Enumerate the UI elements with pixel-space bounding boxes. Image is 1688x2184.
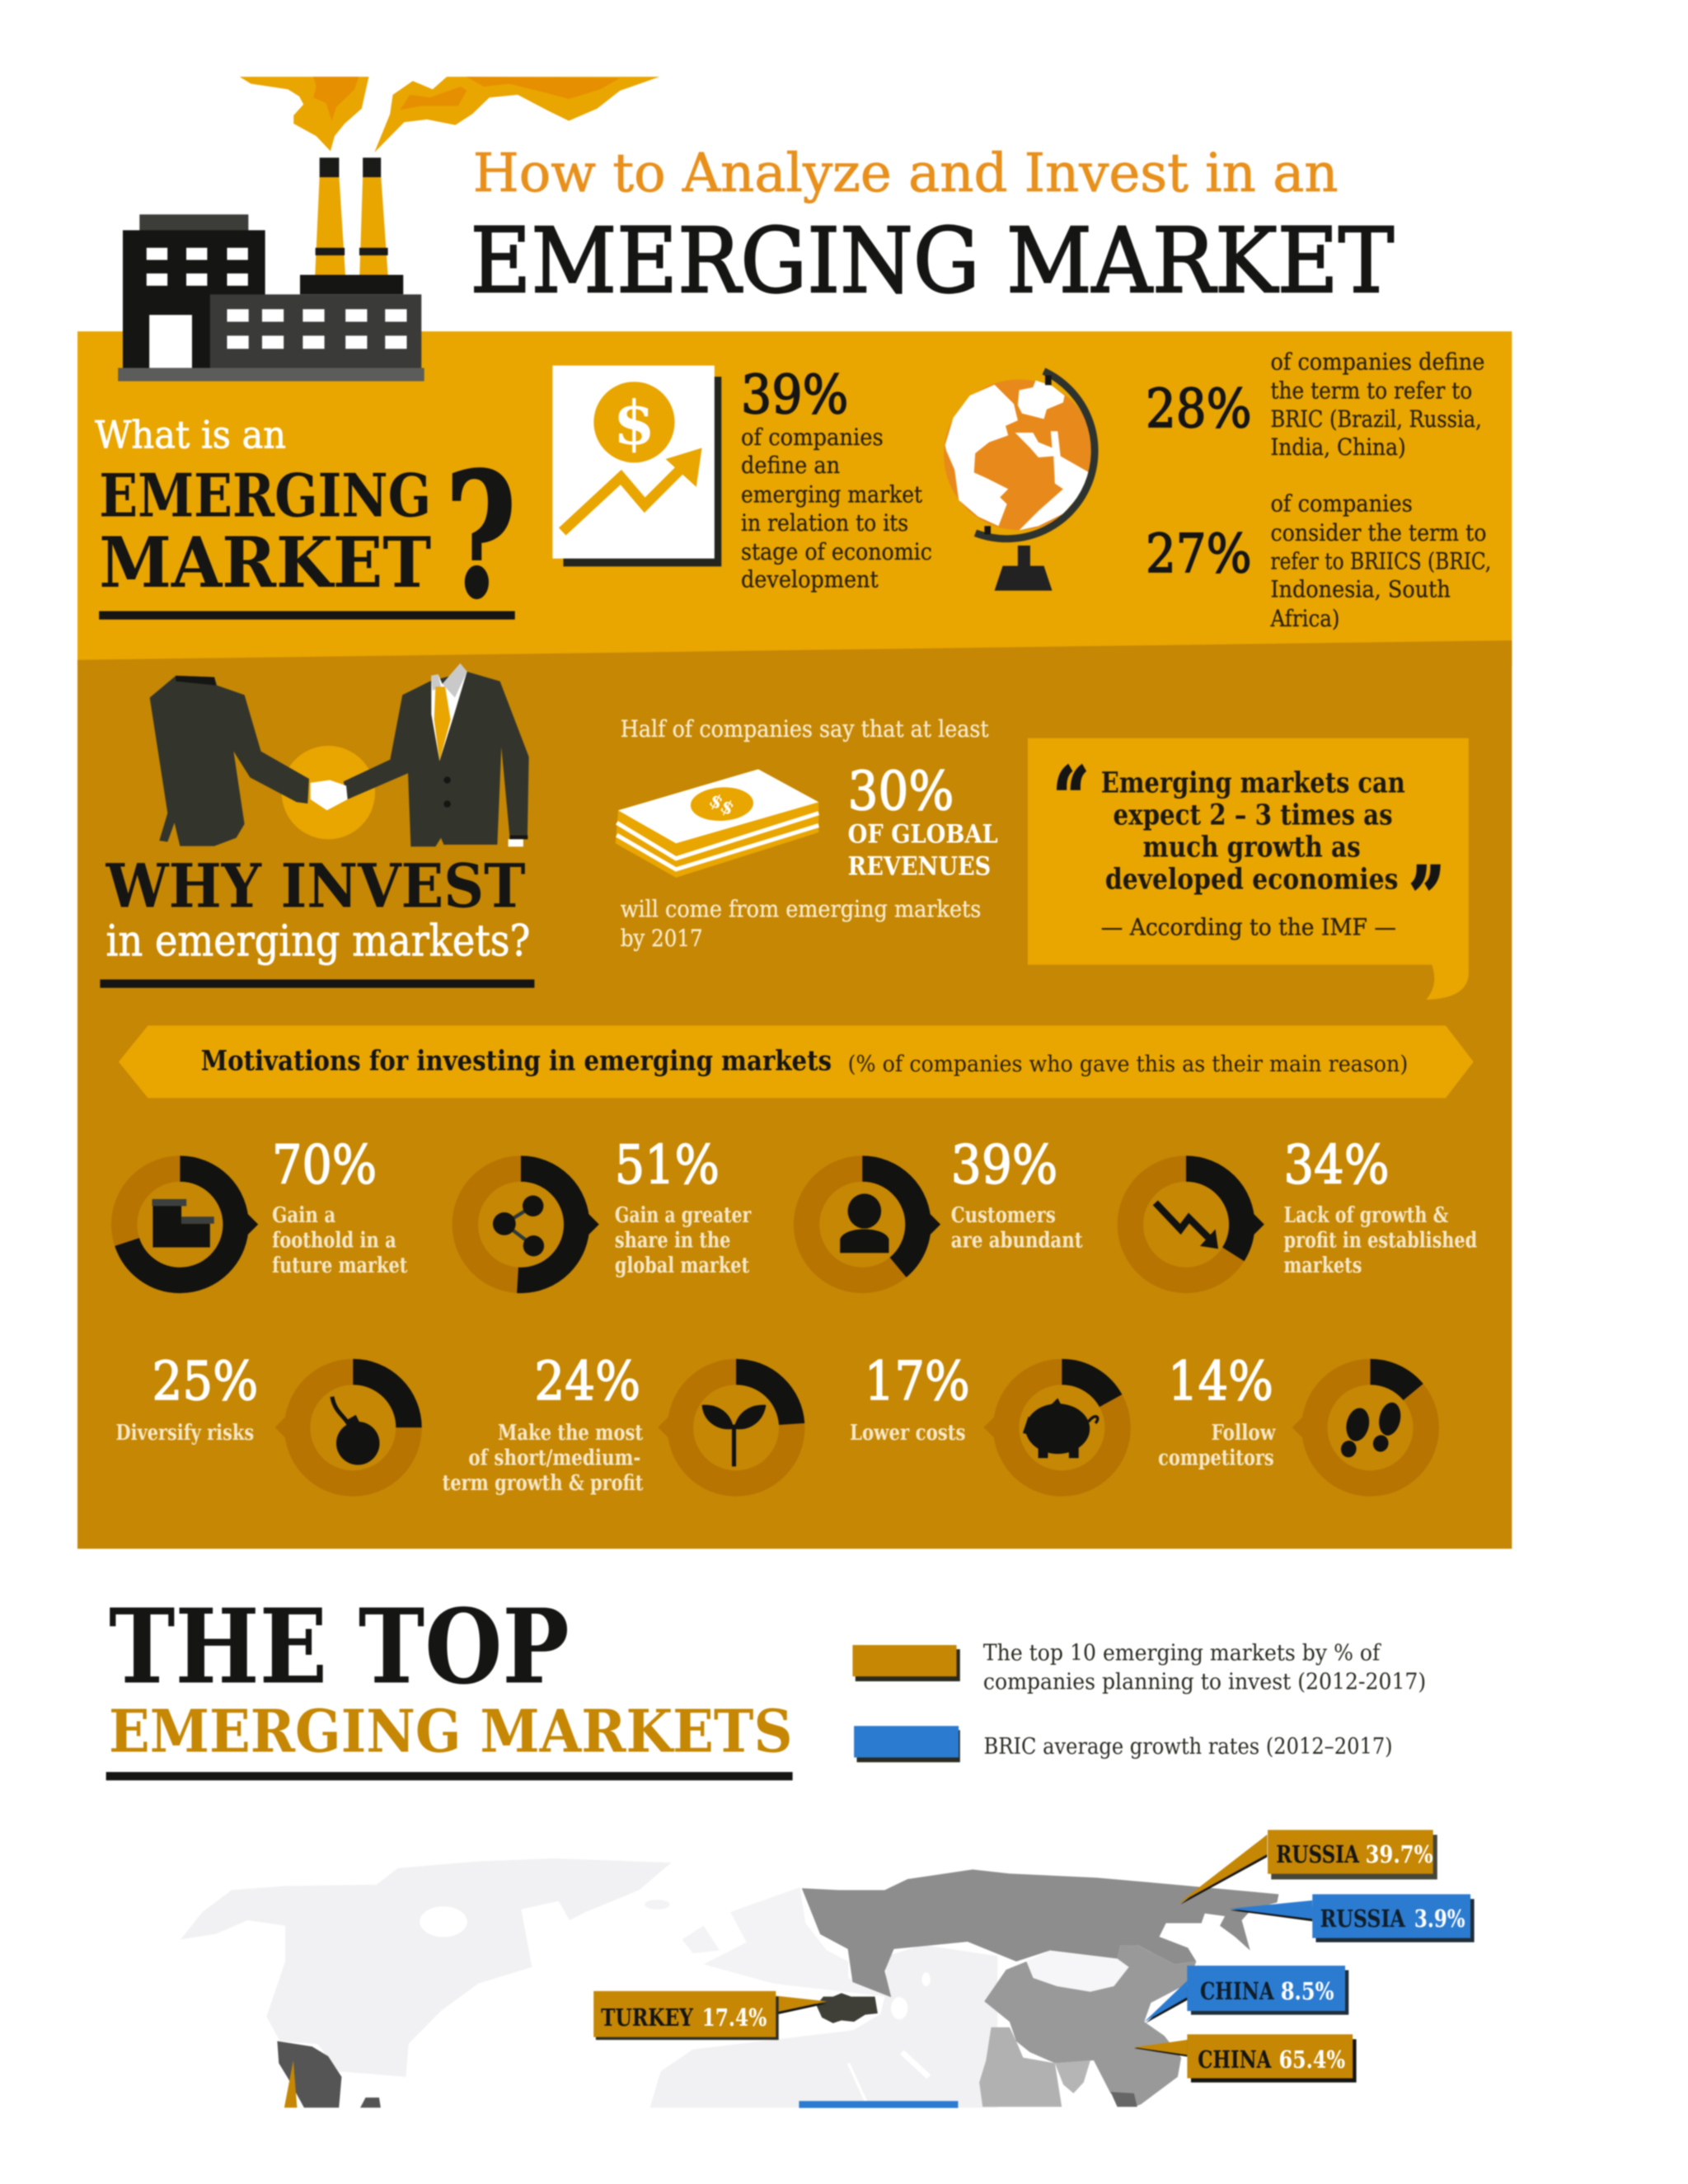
map label: Russia 39.7 percent bbox=[1178, 1830, 1437, 1905]
stat: 28 percent: BRIC (Brazil, Russia, bbox=[1270, 405, 1482, 433]
map label: Turkey 17.4 percent: 17.4% bbox=[702, 2004, 767, 2032]
map label: China 8.5 percent: 8.5% bbox=[1281, 1977, 1334, 2005]
map label: China 65.4 percent: 65.4% bbox=[1279, 2046, 1345, 2074]
callout: IMF quote: ” bbox=[1409, 850, 1444, 944]
title bbox=[471, 143, 1394, 313]
heading: what is an emerging market bbox=[95, 413, 516, 637]
donut: 14 percent follow competitors bbox=[1158, 1351, 1426, 1483]
donut: 70 percent gain a foothold: foothold in a bbox=[272, 1228, 396, 1254]
stat: 28 percent: of companies define bbox=[1270, 349, 1484, 376]
stat: 27 percent: refer to BRIICS (BRIC, bbox=[1270, 548, 1491, 575]
callout: IMF quote: “ bbox=[1053, 751, 1089, 846]
donut: 14 percent follow competitors: competitors bbox=[1158, 1446, 1274, 1471]
legend: The top 10 emerging markets by % of bbox=[983, 1641, 1381, 1666]
panel: what is an emerging market background bbox=[77, 331, 1512, 666]
stat: 39 percent: 39% bbox=[741, 364, 848, 426]
icon: stack of money bbox=[616, 769, 818, 878]
stat: 28 percent: the term to refer to bbox=[1270, 377, 1472, 404]
callout: IMF quote: developed economies bbox=[1105, 862, 1398, 896]
stat: 30 percent of global revenues: 30% bbox=[848, 761, 954, 823]
panel: why invest background bbox=[77, 640, 1512, 1549]
stat: 27 percent: Africa) bbox=[1270, 605, 1339, 632]
stat: 28 percent bbox=[1146, 349, 1484, 461]
donut: 34 percent lack of growth bbox=[1130, 1135, 1477, 1280]
donut: 24 percent short and medium term: Make the most bbox=[498, 1420, 643, 1446]
donut: 51 percent global share: Gain a greater bbox=[615, 1202, 752, 1228]
donut: 24 percent short and medium term: of short/medium- bbox=[468, 1446, 640, 1471]
heading: what is an emerging market: What is an bbox=[95, 413, 286, 457]
map label: clipped blue box bbox=[799, 2101, 958, 2108]
donut: 17 percent lower costs: 17% bbox=[865, 1351, 970, 1413]
donut: 34 percent lack of growth: profit in established bbox=[1284, 1228, 1477, 1254]
stat: 27 percent: of companies bbox=[1270, 490, 1413, 517]
title: How to Analyze and Invest in an bbox=[473, 143, 1339, 204]
icon: stack of money: $$ bbox=[706, 790, 738, 820]
heading: why invest: in emerging markets? bbox=[106, 916, 530, 967]
donut: 70 percent gain a foothold: Gain a bbox=[272, 1202, 335, 1228]
heading: why invest bbox=[100, 851, 534, 988]
stat: 27 percent: 27% bbox=[1146, 523, 1252, 585]
stat: 39 percent: in relation to its bbox=[741, 509, 908, 537]
donut: 24 percent short and medium term bbox=[443, 1351, 792, 1496]
donut: 34 percent lack of growth: Lack of growth & bbox=[1284, 1202, 1449, 1228]
donut: 14 percent follow competitors: 14% bbox=[1168, 1351, 1273, 1413]
heading: what is an emerging market: ? bbox=[445, 435, 516, 637]
donut: 17 percent lower costs bbox=[850, 1351, 1118, 1483]
donut: 39 percent customers: are abundant bbox=[951, 1228, 1083, 1254]
heading: the top emerging markets: THE TOP bbox=[109, 1587, 570, 1708]
stat: 39 percent: stage of economic bbox=[741, 538, 932, 565]
text: will come from emerging markets: will come from emerging markets bbox=[621, 895, 981, 922]
stat: 39 percent: of companies bbox=[741, 424, 884, 451]
stat: 27 percent bbox=[1146, 490, 1491, 632]
stat: 39 percent: define an bbox=[741, 452, 840, 479]
donut: 24 percent short and medium term: 24% bbox=[534, 1351, 640, 1413]
donut: 39 percent customers: 39% bbox=[951, 1135, 1057, 1197]
icon: factory smoke bbox=[240, 77, 659, 152]
stat: 27 percent: Indonesia, South bbox=[1270, 576, 1451, 603]
banner: motivations bbox=[119, 1025, 1474, 1098]
map label: Russia 39.7 percent: 39.7% bbox=[1366, 1840, 1433, 1868]
callout: IMF quote: expect 2 – 3 times as bbox=[1114, 799, 1393, 832]
heading: what is an emerging market: EMERGING bbox=[99, 460, 431, 530]
callout: IMF quote: much growth as bbox=[1143, 830, 1361, 864]
map label: China 8.5 percent: CHINA bbox=[1200, 1977, 1274, 2005]
icon: document with rising chart bbox=[552, 366, 721, 566]
stat: 39 percent: emerging market bbox=[741, 480, 922, 508]
map label: China 65.4 percent bbox=[1134, 2034, 1357, 2083]
donut: 51 percent global share: share in the bbox=[615, 1228, 730, 1254]
map: world bbox=[181, 1858, 1278, 2107]
map label: Russia 3.9 percent bbox=[1230, 1894, 1475, 1943]
stat: 39 percent bbox=[741, 364, 932, 593]
callout: IMF quote bbox=[1028, 738, 1469, 1000]
stat: 30 percent of global revenues bbox=[848, 761, 998, 882]
stat: 30 percent of global revenues: OF GLOBAL bbox=[848, 820, 998, 850]
icon: globe bbox=[944, 371, 1095, 591]
map label: Turkey 17.4 percent: TURKEY bbox=[601, 2004, 693, 2032]
map label: China 8.5 percent bbox=[1144, 1966, 1348, 2023]
donut: 34 percent lack of growth: 34% bbox=[1284, 1135, 1390, 1197]
legend bbox=[852, 1641, 1426, 1762]
heading: why invest: WHY INVEST bbox=[106, 851, 526, 921]
donut: 70 percent gain a foothold: 70% bbox=[272, 1135, 377, 1197]
icon: handshake between suits bbox=[150, 663, 529, 846]
banner: motivations: Motivations for investing in emerging markets bbox=[201, 1044, 832, 1077]
map label: Russia 39.7 percent: RUSSIA bbox=[1276, 1840, 1360, 1868]
donut: 25 percent diversify risks bbox=[116, 1351, 409, 1483]
donut: 51 percent global share: 51% bbox=[615, 1135, 720, 1197]
banner: motivations: (% of companies who gave this as their main reason) bbox=[848, 1052, 1408, 1077]
stat: 27 percent: consider the term to bbox=[1270, 519, 1487, 546]
map label: China 65.4 percent: CHINA bbox=[1198, 2046, 1272, 2074]
map label: Russia 3.9 percent: 3.9% bbox=[1414, 1905, 1465, 1933]
heading: what is an emerging market: MARKET bbox=[99, 522, 431, 603]
legend: BRIC average growth rates (2012–2017) bbox=[984, 1734, 1393, 1760]
text: will come from emerging markets: by 2017 bbox=[621, 925, 703, 952]
title: EMERGING MARKET bbox=[471, 209, 1394, 313]
donut: 25 percent diversify risks: Diversify risks bbox=[116, 1420, 254, 1446]
text: half of companies: Half of companies say that at least bbox=[621, 715, 989, 743]
heading: the top emerging markets: EMERGING MARKETS bbox=[109, 1697, 793, 1766]
stat: 28 percent: 28% bbox=[1146, 378, 1252, 440]
legend: companies planning to invest (2012-2017) bbox=[983, 1669, 1426, 1694]
donut: 70 percent gain a foothold bbox=[124, 1135, 407, 1280]
heading: the top emerging markets bbox=[106, 1587, 793, 1780]
text: will come from emerging markets bbox=[621, 895, 981, 952]
donut: 14 percent follow competitors: Follow bbox=[1212, 1420, 1277, 1446]
map label: Russia 3.9 percent: RUSSIA bbox=[1320, 1905, 1405, 1933]
donut: 17 percent lower costs: Lower costs bbox=[850, 1420, 966, 1446]
donut: 34 percent lack of growth: markets bbox=[1284, 1253, 1362, 1278]
donut: 51 percent global share: global market bbox=[615, 1253, 749, 1278]
donut: 70 percent gain a foothold: future market bbox=[272, 1253, 407, 1278]
donut: 39 percent customers bbox=[807, 1135, 1083, 1280]
stat: 28 percent: India, China) bbox=[1270, 434, 1406, 461]
donut: 25 percent diversify risks: 25% bbox=[152, 1351, 258, 1413]
donut: 51 percent global share bbox=[465, 1135, 752, 1280]
icon: factory bbox=[118, 157, 424, 382]
callout: IMF quote: Emerging markets can bbox=[1101, 766, 1405, 800]
map label: Turkey 17.4 percent bbox=[593, 1991, 827, 2040]
callout: IMF quote: — According to the IMF — bbox=[1101, 913, 1396, 940]
donut: 39 percent customers: Customers bbox=[951, 1202, 1056, 1228]
donut: 24 percent short and medium term: term growth & profit bbox=[443, 1470, 643, 1496]
stat: 30 percent of global revenues: REVENUES bbox=[848, 852, 991, 882]
stat: 39 percent: development bbox=[741, 566, 879, 593]
icon: document with rising chart: $ bbox=[613, 388, 655, 458]
